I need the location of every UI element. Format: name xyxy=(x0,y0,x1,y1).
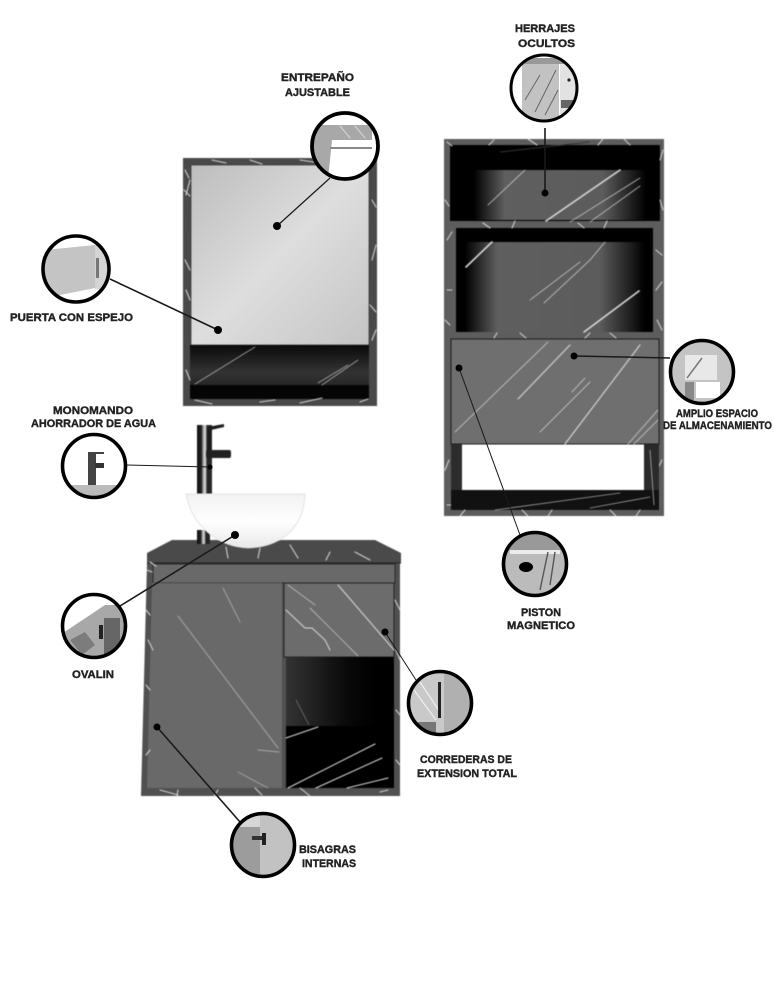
label: piston magnetico: MAGNETICO xyxy=(507,620,575,632)
icon: full extension slides detail xyxy=(407,670,474,736)
label: herrajes ocultos: OCULTOS xyxy=(518,38,575,50)
basin xyxy=(186,494,305,548)
icon: storage space detail xyxy=(669,339,735,405)
label: amplio espacio de almacenamiento: AMPLIO ESPACIO xyxy=(676,408,758,420)
label: monomando ahorrador de agua xyxy=(31,405,156,430)
label: bisagras internas: BISAGRAS xyxy=(299,844,356,856)
panel: mirror cabinet xyxy=(183,158,377,406)
icon: internal hinges detail xyxy=(230,812,296,878)
label: entrepaño ajustable: ENTREPAÑO xyxy=(281,71,354,84)
label: monomando ahorrador de agua: AHORRADOR DE AGUA xyxy=(31,418,156,430)
icon: magnetic piston detail xyxy=(502,531,568,597)
label: correderas de extension total: CORREDERAS DE xyxy=(420,754,512,766)
panel: tall open cabinet xyxy=(444,139,664,516)
label: monomando ahorrador de agua: MONOMANDO xyxy=(53,405,133,417)
drawer xyxy=(284,583,394,657)
label: amplio espacio de almacenamiento xyxy=(663,408,772,432)
icon: mirror door detail xyxy=(42,235,110,303)
marker dots xyxy=(154,190,578,730)
open compartment xyxy=(286,657,394,788)
drawer front xyxy=(451,339,659,444)
label: piston magnetico: PISTON xyxy=(521,607,561,619)
bottom shelf xyxy=(451,444,659,516)
label: puerta con espejo: PUERTA CON ESPEJO xyxy=(10,312,133,324)
countertop xyxy=(147,540,401,563)
icon: faucet detail xyxy=(60,433,128,505)
label: piston magnetico xyxy=(507,607,575,632)
middle niche xyxy=(456,228,653,332)
label: entrepaño ajustable xyxy=(281,71,354,99)
icon: hidden hardware detail xyxy=(510,54,582,122)
left door xyxy=(147,583,282,788)
label: entrepaño ajustable: AJUSTABLE xyxy=(285,87,350,99)
panel: vanity cabinet xyxy=(141,540,401,796)
label: ovalin: OVALIN xyxy=(72,669,114,681)
lower open gap xyxy=(462,444,644,490)
icon: adjustable shelf detail xyxy=(310,112,380,180)
faucet xyxy=(197,424,231,544)
leader lines xyxy=(110,128,670,822)
label: bisagras internas xyxy=(299,844,356,870)
under-top recess xyxy=(153,564,395,583)
label: correderas de extension total: EXTENSION TOTAL xyxy=(417,768,517,780)
mirror door xyxy=(191,165,369,345)
label: herrajes ocultos xyxy=(515,23,575,50)
open shelf xyxy=(190,345,369,399)
label: bisagras internas: INTERNAS xyxy=(302,858,356,870)
label: herrajes ocultos: HERRAJES xyxy=(515,23,575,35)
icon: basin detail xyxy=(60,593,128,660)
label: correderas de extension total xyxy=(417,754,517,780)
top niche xyxy=(450,142,660,222)
